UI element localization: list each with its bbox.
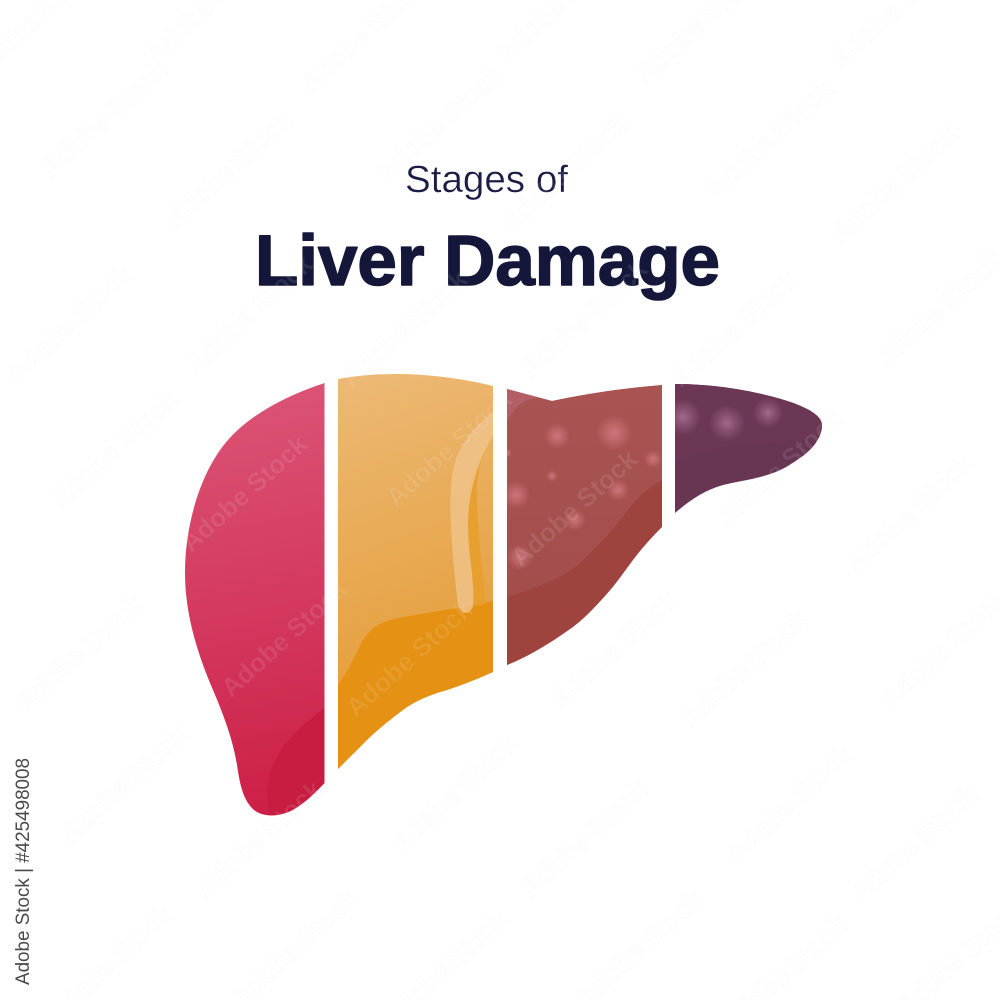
watermark pattern: Adobe Stock — [190, 774, 328, 903]
watermark pattern: Adobe Stock — [700, 74, 838, 203]
watermark pattern: Adobe Stock — [720, 739, 858, 868]
watermark pattern: Adobe Stock — [545, 584, 683, 713]
watermark pattern: Adobe Stock — [385, 729, 523, 858]
watermark pattern: Adobe Stock — [675, 604, 813, 733]
watermark pattern: Adobe Stock — [340, 594, 478, 723]
watermark pattern: Adobe Stock — [380, 384, 518, 513]
watermark pattern: Adobe Stock — [215, 574, 353, 703]
watermark pattern: Adobe Stock — [495, 109, 633, 238]
watermark pattern: Adobe Stock — [845, 779, 983, 908]
watermark pattern: Adobe Stock — [180, 249, 318, 378]
watermark pattern: Adobe Stock — [840, 449, 978, 578]
watermark pattern: Adobe Stock — [35, 54, 173, 183]
stock id label: Adobe Stock | #425498008 — [13, 758, 34, 985]
watermark pattern: Adobe Stock — [45, 384, 183, 513]
watermark pattern: Adobe Stock — [370, 59, 508, 188]
watermark pattern: Adobe Stock — [175, 429, 313, 558]
stage 4: cirrhosis liver segment — [675, 384, 822, 513]
watermark pattern: Adobe Stock — [515, 774, 653, 903]
watermark pattern: Adobe Stock — [825, 119, 963, 248]
title: Liver Damage — [255, 222, 720, 301]
subtitle: Stages of — [405, 159, 568, 201]
stage 2: fatty liver segment — [338, 374, 493, 769]
watermark pattern: Adobe Stock — [515, 254, 653, 383]
stage 3: fibrosis liver segment — [502, 385, 662, 665]
watermark pattern: Adobe Stock — [665, 264, 803, 393]
stage 1: healthy liver segment — [185, 383, 330, 825]
watermark pattern: Adobe Stock — [710, 404, 848, 533]
watermark pattern: Adobe Stock — [335, 264, 473, 393]
watermark pattern: Adobe Stock — [160, 104, 298, 233]
watermark pattern: Adobe Stock — [10, 589, 148, 718]
watermark pattern: Adobe Stock — [55, 719, 193, 848]
watermark pattern: Adobe Stock — [0, 259, 138, 388]
watermark pattern: Adobe Stock — [505, 444, 643, 573]
infographic canvas — [15, 164, 822, 985]
